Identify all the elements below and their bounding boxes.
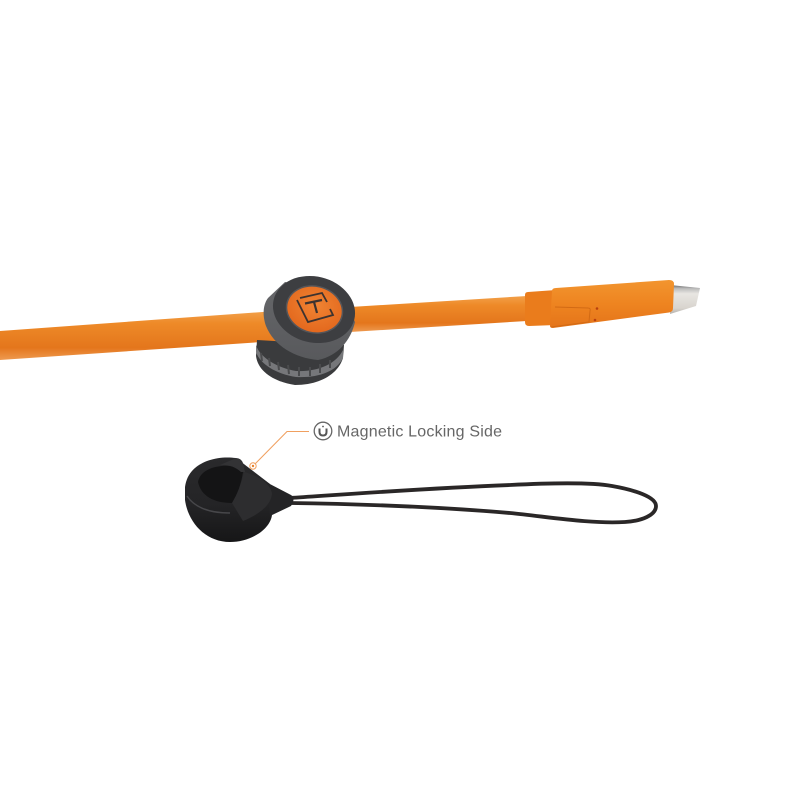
- connector body: [550, 280, 674, 328]
- knob inner ring: [281, 279, 348, 340]
- puck body: [185, 457, 272, 542]
- orange button: [282, 281, 347, 338]
- logo: square T mark: [297, 293, 333, 322]
- USB-C connector: [525, 280, 700, 328]
- callout label: Magnetic Locking Side: [337, 424, 502, 440]
- cable left section: [0, 311, 276, 360]
- cable clip knob: [256, 267, 362, 385]
- connector collar: [525, 290, 556, 326]
- metal plug: [670, 285, 700, 314]
- threaded base: [256, 340, 344, 385]
- callout: magnetic locking side: [250, 422, 502, 469]
- flap plate: [232, 472, 272, 521]
- puck rim highlight: [187, 496, 230, 513]
- knob face ring: [266, 267, 362, 352]
- leader line: [253, 432, 309, 466]
- cable: orange USB-C cable: [0, 280, 700, 360]
- leader target dot: [250, 463, 256, 469]
- cable right section: [350, 296, 527, 332]
- puck recess: [198, 466, 243, 503]
- braided cord loop: [290, 483, 656, 522]
- strap tab: [266, 482, 294, 516]
- lanyard with magnetic puck: [185, 457, 656, 542]
- knob side wall: [264, 282, 355, 360]
- connector clip recess: [551, 307, 590, 327]
- puck lip: [220, 458, 245, 472]
- icon: magnet in circle: [314, 422, 332, 440]
- connector dots: [594, 307, 598, 321]
